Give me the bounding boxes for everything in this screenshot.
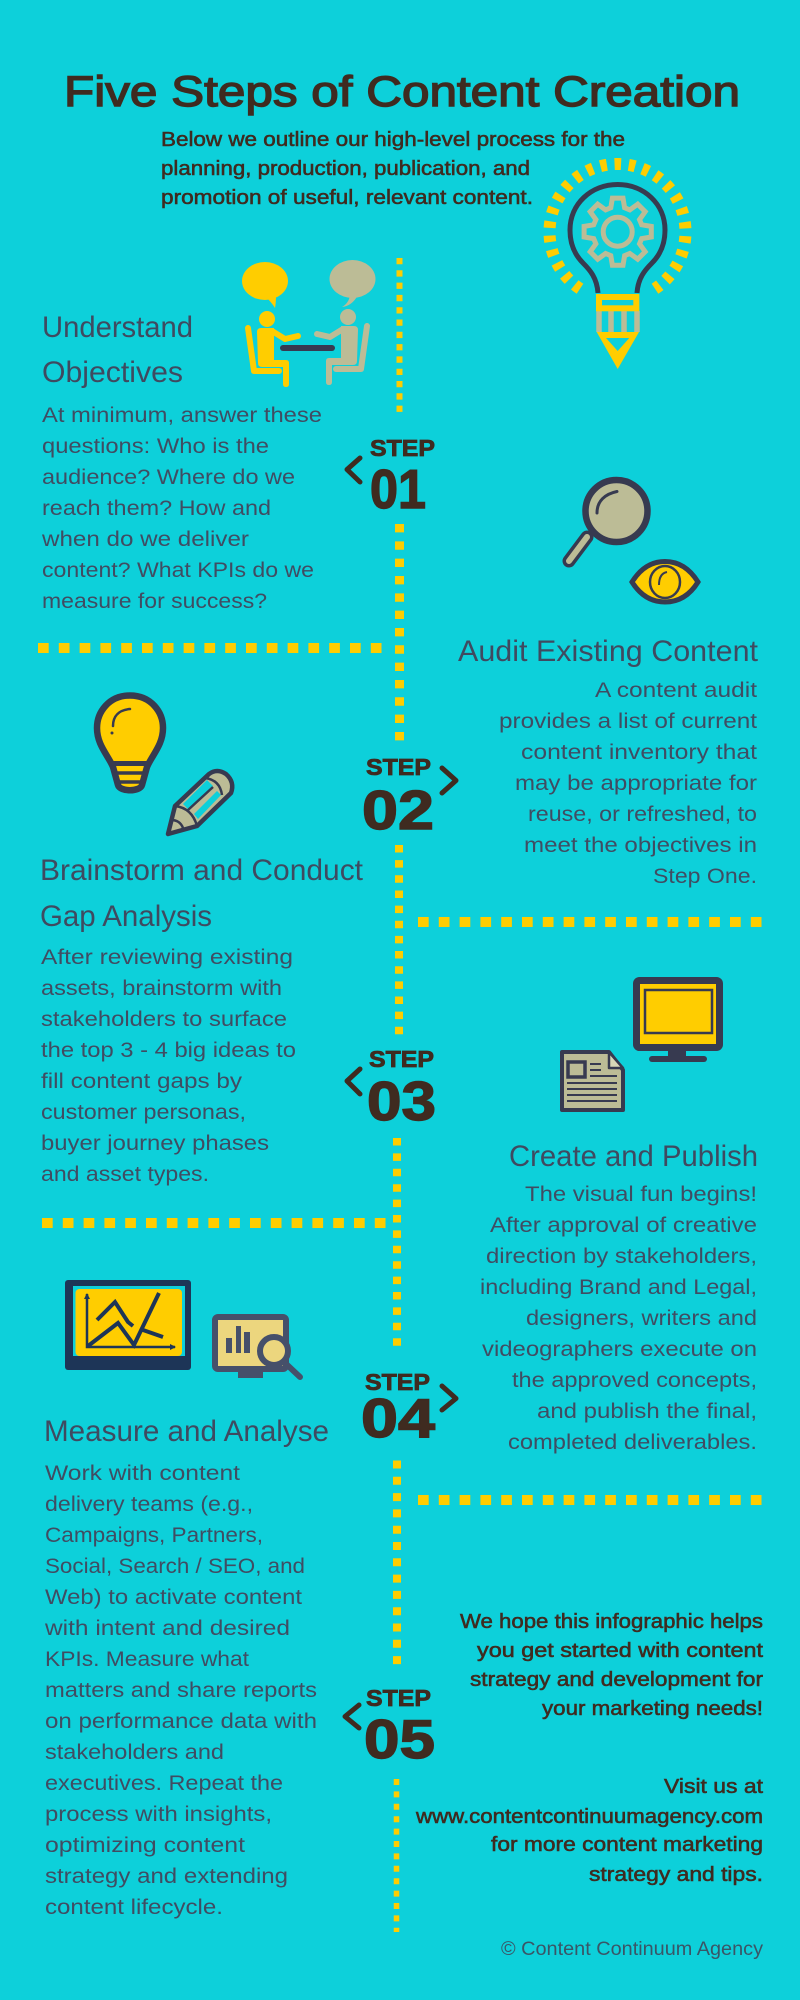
text: step 5 body: Social, Search / SEO, and bbox=[45, 1554, 305, 1578]
closing message bbox=[460, 1611, 764, 1720]
text: step 5 body: optimizing content bbox=[45, 1833, 245, 1857]
text: step 3 body: buyer journey phases bbox=[41, 1131, 269, 1155]
text: step 5 body: with intent and desired bbox=[44, 1616, 290, 1640]
icon: eye bbox=[632, 562, 698, 602]
closing message: your marketing needs! bbox=[542, 1698, 763, 1720]
icon: document bbox=[562, 1052, 623, 1110]
text: step 3 body: stakeholders to surface bbox=[41, 1007, 287, 1031]
call to action bbox=[415, 1776, 764, 1886]
text: step 3 body: customer personas, bbox=[41, 1100, 246, 1124]
text: step 1 body: reach them? How and bbox=[42, 496, 271, 520]
heading: Understand Objectives: Understand bbox=[42, 311, 193, 344]
closing message: We hope this infographic helps bbox=[460, 1611, 763, 1633]
text: step 5 body: strategy and extending bbox=[45, 1864, 288, 1888]
step 05 marker bbox=[345, 1685, 435, 1770]
text: step 5 body: on performance data with bbox=[45, 1709, 317, 1733]
text: step 5 body: stakeholders and bbox=[45, 1740, 224, 1764]
intro text: promotion of useful, relevant content. bbox=[161, 187, 533, 209]
text: step 2 body: meet the objectives in bbox=[524, 833, 757, 857]
heading: Brainstorm and Conduct Gap Analysis bbox=[40, 854, 364, 933]
text: step 1 body bbox=[41, 403, 322, 613]
text: step 5 body: Web) to activate content bbox=[45, 1585, 302, 1609]
call to action: www.contentcontinuumagency.com bbox=[415, 1806, 763, 1828]
text: step 4 body: and publish the final, bbox=[537, 1399, 757, 1423]
text: step 1 body: measure for success? bbox=[42, 589, 267, 613]
heading: Brainstorm and Conduct Gap Analysis: Brainstorm and Conduct bbox=[40, 854, 364, 887]
copyright: © Content Continuum Agency bbox=[501, 1939, 764, 1960]
text: step 3 body: After reviewing existing bbox=[41, 945, 293, 969]
step 03 marker bbox=[347, 1046, 436, 1132]
step 02 marker: STEP bbox=[366, 754, 431, 780]
icon: line chart screen bbox=[65, 1280, 191, 1370]
text: step 4 body: designers, writers and bbox=[526, 1306, 757, 1330]
step 03 marker: STEP bbox=[369, 1046, 434, 1072]
text: step 2 body: Step One. bbox=[653, 864, 757, 888]
call to action: for more content marketing bbox=[491, 1834, 763, 1856]
icon: analytics screen with magnifier bbox=[215, 1317, 300, 1378]
text: step 5 body: executives. Repeat the bbox=[45, 1771, 283, 1795]
step 04 marker: 04 bbox=[361, 1387, 435, 1449]
text: step 3 body: and asset types. bbox=[41, 1162, 209, 1186]
text: step 5 body: delivery teams (e.g., bbox=[45, 1492, 253, 1516]
heading: Understand Objectives bbox=[42, 311, 193, 389]
text: step 5 body: matters and share reports bbox=[45, 1678, 317, 1702]
step 04 marker bbox=[361, 1369, 456, 1449]
text: step 2 body bbox=[499, 678, 757, 888]
heading: Understand Objectives: Objectives bbox=[42, 356, 183, 389]
text: step 4 body: After approval of creative bbox=[490, 1213, 757, 1237]
text: step 4 body: direction by stakeholders, bbox=[486, 1244, 757, 1268]
text: step 1 body: At minimum, answer these bbox=[42, 403, 322, 427]
text: step 5 body: content lifecycle. bbox=[45, 1895, 223, 1919]
text: step 1 body: when do we deliver bbox=[41, 527, 249, 551]
text: step 5 body bbox=[44, 1461, 317, 1919]
icon: desktop monitor bbox=[636, 980, 720, 1062]
text: step 2 body: A content audit bbox=[595, 678, 757, 702]
text: step 2 body: provides a list of current bbox=[499, 709, 757, 733]
intro text bbox=[161, 129, 625, 209]
text: step 4 body: the approved concepts, bbox=[512, 1368, 757, 1392]
text: step 3 body: assets, brainstorm with bbox=[41, 976, 282, 1000]
icon: light bulb bbox=[97, 696, 163, 790]
text: step 5 body: process with insights, bbox=[45, 1802, 272, 1826]
text: step 5 body: Campaigns, Partners, bbox=[45, 1523, 263, 1547]
step 05 marker: STEP bbox=[366, 1685, 431, 1711]
heading: Audit Existing Content: Audit Existing Content bbox=[458, 635, 759, 668]
step 05 marker: 05 bbox=[364, 1708, 435, 1770]
step 01 marker bbox=[347, 435, 435, 520]
text: step 4 body: completed deliverables. bbox=[508, 1430, 757, 1454]
text: step 4 body: including Brand and Legal, bbox=[480, 1275, 757, 1299]
text: step 3 body: fill content gaps by bbox=[41, 1069, 242, 1093]
icon: pencil bbox=[168, 771, 232, 834]
call to action: Visit us at bbox=[664, 1776, 764, 1798]
text: step 4 body: videographers execute on bbox=[482, 1337, 757, 1361]
heading: Create and Publish: Create and Publish bbox=[509, 1140, 758, 1173]
text: step 2 body: may be appropriate for bbox=[515, 771, 757, 795]
text: step 1 body: content? What KPIs do we bbox=[42, 558, 314, 582]
text: step 4 body: The visual fun begins! bbox=[525, 1182, 757, 1206]
step 01 marker: 01 bbox=[370, 458, 426, 520]
heading: Brainstorm and Conduct Gap Analysis: Gap Analysis bbox=[40, 900, 212, 933]
text: step 1 body: audience? Where do we bbox=[42, 465, 295, 489]
step 02 marker bbox=[362, 754, 456, 841]
closing message: you get started with content bbox=[477, 1640, 764, 1662]
text: step 1 body: questions: Who is the bbox=[42, 434, 269, 458]
step 01 marker: STEP bbox=[370, 435, 435, 461]
step 03 marker: 03 bbox=[367, 1070, 436, 1132]
text: step 4 body bbox=[480, 1182, 757, 1454]
step 04 marker: STEP bbox=[365, 1369, 430, 1395]
text: step 2 body: content inventory that bbox=[521, 740, 757, 764]
text: step 5 body: KPIs. Measure what bbox=[45, 1647, 249, 1671]
icon: lightbulb with gear and pencil bbox=[550, 164, 686, 369]
text: step 3 body bbox=[41, 945, 296, 1186]
title: Five Steps of Content Creation bbox=[64, 68, 740, 116]
icon: two people talking at a table bbox=[242, 260, 376, 387]
text: step 2 body: reuse, or refreshed, to bbox=[528, 802, 757, 826]
heading: Measure and Analyse: Measure and Analyse bbox=[44, 1415, 329, 1448]
text: step 3 body: the top 3 - 4 big ideas to bbox=[41, 1038, 296, 1062]
step 02 marker: 02 bbox=[362, 779, 434, 841]
intro text: Below we outline our high-level process for the bbox=[161, 129, 625, 151]
call to action: strategy and tips. bbox=[589, 1864, 763, 1886]
intro text: planning, production, publication, and bbox=[161, 158, 530, 180]
icon: magnifying glass bbox=[569, 480, 648, 561]
text: step 5 body: Work with content bbox=[45, 1461, 240, 1485]
closing message: strategy and development for bbox=[470, 1669, 763, 1691]
